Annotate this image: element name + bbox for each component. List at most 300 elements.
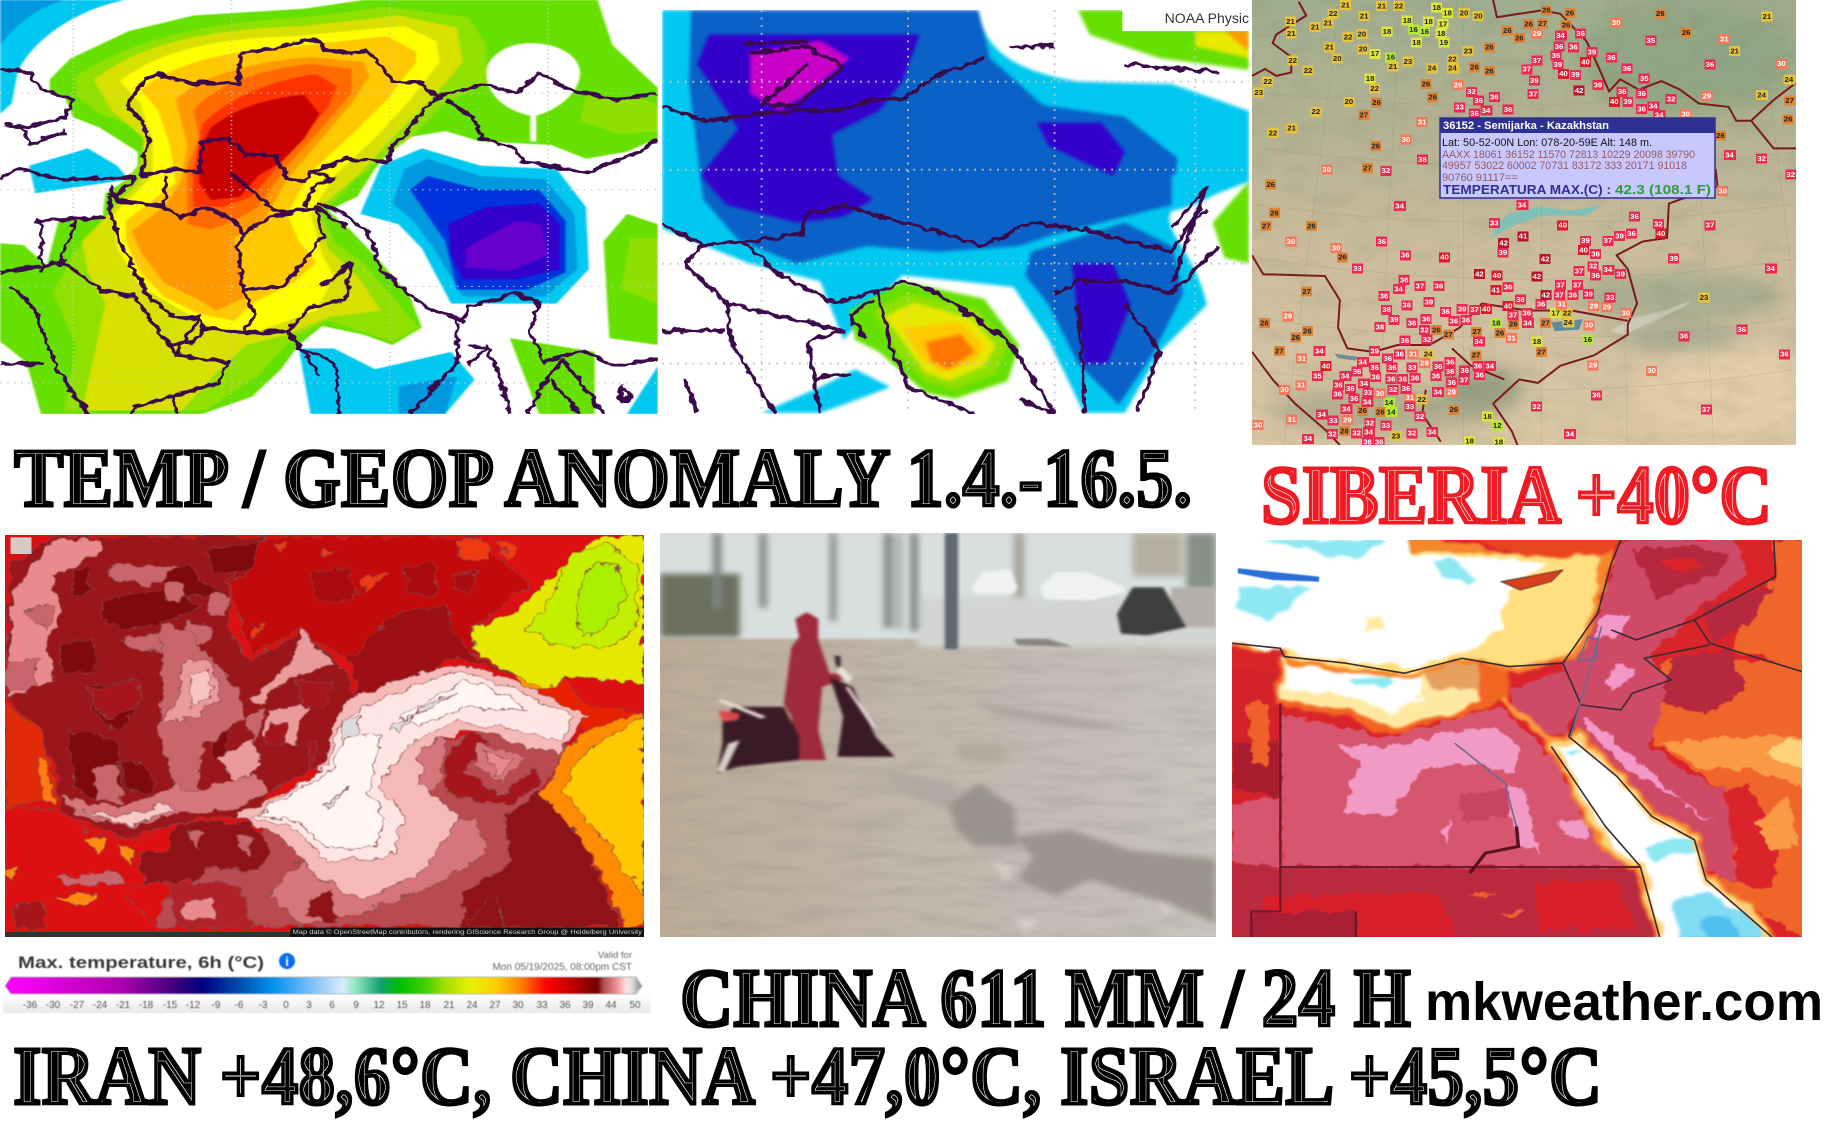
scale values: 24 — [466, 1000, 478, 1011]
weather stations: 26 — [1682, 28, 1690, 37]
weather stations: 20 — [1333, 54, 1342, 63]
weather stations: 34 — [1518, 201, 1527, 209]
weather stations: 32 — [1654, 220, 1663, 229]
weather stations: 18 — [1533, 337, 1541, 346]
weather stations: 26 — [1485, 43, 1494, 52]
panel: max temperature map — [5, 535, 644, 937]
weather stations: 30 — [1375, 389, 1384, 398]
heading: temperature records: IRAN +48,6°C, CHINA +47,0°C, ISRAEL +45,5°C — [13, 1030, 1602, 1123]
scale values: 0 — [283, 1000, 289, 1011]
weather stations: 16 — [1386, 53, 1395, 62]
weather stations: 29 — [1589, 302, 1598, 310]
weather stations: 26 — [1307, 222, 1316, 230]
weather stations: 34 — [1395, 202, 1405, 210]
weather stations: 31 — [1297, 381, 1305, 390]
weather stations: 26 — [1270, 209, 1279, 218]
weather stations: 30 — [1612, 18, 1621, 27]
country borders — [0, 40, 658, 414]
weather stations: 38 — [1382, 305, 1391, 314]
weather stations: 36 — [1432, 372, 1440, 380]
weather stations: 22 — [1329, 9, 1338, 18]
weather stations: 16 — [1409, 25, 1418, 34]
weather stations: 23 — [1464, 47, 1472, 55]
weather stations: 36 — [1350, 394, 1358, 403]
weather stations: 33 — [1606, 293, 1615, 302]
weather stations: 42 — [1499, 239, 1508, 248]
weather stations: 17 — [1439, 20, 1447, 28]
weather stations: 38 — [1418, 155, 1427, 164]
scale values: -15 — [163, 1000, 178, 1011]
weather stations: 31 — [1405, 393, 1414, 402]
weather stations: 32 — [1381, 166, 1390, 175]
top coast strip — [1447, 533, 1629, 555]
weather stations: 36 — [1618, 87, 1627, 96]
weather stations: 40 — [1559, 70, 1568, 78]
panel: max temperature legend — [3, 950, 651, 1013]
scale values: -27 — [70, 1000, 85, 1011]
Sudan — [1232, 863, 1660, 943]
weather stations: 34 — [1315, 347, 1324, 355]
Libya side — [1232, 670, 1280, 866]
weather stations: 36 — [1490, 93, 1499, 101]
weather stations: 26 — [1524, 20, 1533, 28]
weather stations: 26 — [1716, 131, 1725, 140]
weather stations: 38 — [1375, 323, 1384, 331]
scale values: 27 — [489, 1000, 501, 1011]
heading: Siberia: SIBERIA +40°C — [1261, 449, 1772, 542]
weather stations: 24 — [1427, 64, 1437, 73]
Sinai — [1509, 670, 1578, 737]
weather stations: 32 — [1667, 95, 1675, 103]
weather stations: 32 — [1786, 170, 1795, 179]
weather stations: 26 — [1565, 9, 1574, 17]
scale values: 36 — [559, 1000, 571, 1011]
weather stations: 26 — [1450, 405, 1458, 414]
lower right rose — [151, 730, 623, 927]
weather stations: 21 — [1360, 12, 1369, 20]
weather stations: 36 — [1395, 350, 1404, 359]
weather stations: 36 — [1375, 438, 1383, 447]
weather stations: 36 — [1679, 332, 1688, 341]
weather stations: 40 — [1579, 246, 1588, 254]
pale band — [236, 663, 589, 900]
weather stations: 34 — [1604, 265, 1613, 274]
weather stations: 36 — [1353, 367, 1361, 376]
weather stations: 34 — [1565, 430, 1575, 438]
weather stations: 37 — [1575, 267, 1584, 275]
weather stations: 34 — [1485, 362, 1495, 370]
icon: info: i — [285, 954, 289, 969]
weather stations: 18 — [1403, 16, 1412, 25]
weather stations: 36 — [1461, 316, 1470, 324]
heading: China rainfall: CHINA 611 MM / 24 H — [680, 952, 1411, 1045]
weather stations: 14 — [1384, 398, 1394, 407]
weather stations: 23 — [1254, 88, 1263, 97]
weather stations: 26 — [1432, 326, 1441, 334]
weather stations: 36 — [1400, 276, 1409, 284]
weather stations: 39 — [1553, 60, 1562, 69]
weather stations: 26 — [1485, 67, 1494, 75]
weather stations: 29 — [1447, 388, 1456, 396]
weather stations: 36 — [1627, 229, 1636, 238]
grid dots — [662, 10, 1249, 414]
Mediterranean — [1218, 533, 1613, 678]
weather stations: 29 — [1602, 303, 1611, 311]
weather stations: 22 — [1448, 55, 1457, 64]
weather stations: 26 — [1358, 407, 1367, 415]
weather stations: 33 — [1490, 219, 1499, 228]
weather stations: 30 — [1585, 321, 1593, 330]
weather stations: 22 — [1312, 107, 1320, 116]
left maroon — [6, 537, 358, 837]
weather stations: 36 — [1380, 292, 1388, 300]
weather stations: 36 — [1422, 315, 1431, 323]
weather stations: 28 — [1340, 427, 1349, 436]
scale values: 39 — [582, 1000, 594, 1011]
weather stations: 26 — [1496, 329, 1504, 337]
weather stations: 39 — [1623, 97, 1632, 106]
weather stations: 34 — [1523, 319, 1533, 327]
weather stations: 39 — [1584, 290, 1593, 298]
bottom-left red with maroon knots — [5, 807, 181, 937]
weather stations: 36 — [1470, 109, 1479, 118]
weather stations: 29 — [1454, 81, 1462, 90]
weather stations: 40 — [1610, 97, 1619, 106]
scooter rider — [717, 612, 895, 773]
weather stations: 24 — [1785, 75, 1794, 84]
weather stations: 22 — [1417, 395, 1426, 404]
weather stations: 42 — [1475, 270, 1484, 278]
yellow/orange sea — [518, 677, 564, 700]
weather stations: 22 — [1288, 56, 1297, 65]
weather stations: 37 — [1706, 221, 1714, 230]
weather stations: 36 — [1474, 96, 1483, 105]
weather stations: 37 — [1470, 305, 1479, 314]
weather stations: 36 — [1434, 362, 1443, 371]
weather stations: 30 — [1287, 237, 1295, 246]
weather stations: 42 — [1541, 255, 1549, 263]
weather stations: 22 — [1563, 309, 1572, 318]
weather stations: 33 — [1364, 388, 1372, 397]
weather stations: 36 — [1780, 350, 1789, 359]
weather stations: 21 — [1377, 2, 1386, 10]
weather stations: 36 — [1737, 325, 1746, 334]
weather stations: 27 — [1537, 348, 1546, 356]
weather stations: 26 — [1376, 408, 1385, 416]
weather stations: 20 — [1359, 45, 1367, 54]
country borders — [662, 42, 1219, 414]
legend title: Max. temperature, 6h (°C) — [18, 953, 264, 972]
weather stations: 36 — [1411, 374, 1419, 382]
weather stations: 21 — [1324, 19, 1332, 27]
weather stations: 22 — [1263, 77, 1272, 86]
weather stations: 21 — [1287, 124, 1296, 133]
weather stations: 33 — [1381, 421, 1390, 430]
weather stations: 34 — [1341, 372, 1350, 380]
weather stations: 36 — [1447, 378, 1456, 387]
weather stations: 39 — [1499, 248, 1507, 257]
scale values: 21 — [443, 1000, 455, 1011]
weather stations: 16 — [1420, 27, 1429, 36]
weather stations: 36 — [1504, 283, 1512, 291]
scale values: -30 — [46, 1000, 61, 1011]
valid time: Valid for — [598, 950, 632, 961]
attribution strip: Map data © OpenStreetMap contributors, rendering GIScience Research Group @ Heidelberg University — [293, 929, 643, 936]
weather stations: 36 — [1569, 43, 1578, 52]
weather stations: 32 — [1589, 262, 1597, 271]
weather stations: 30 — [1280, 385, 1289, 394]
weather stations: 23 — [1404, 57, 1412, 66]
scale values: -21 — [116, 1000, 131, 1011]
Egypt — [1280, 707, 1640, 866]
Red Sea — [1545, 732, 1780, 943]
weather stations: 23 — [1700, 293, 1708, 302]
weather stations: 35 — [1640, 74, 1649, 83]
weather stations: 20 — [1474, 12, 1483, 20]
grid dots — [0, 0, 658, 414]
weather stations: 34 — [1342, 405, 1351, 413]
scale values: 6 — [329, 1000, 335, 1011]
weather stations: 27 — [1472, 328, 1481, 336]
weather stations: 37 — [1556, 281, 1565, 289]
weather stations: 32 — [1365, 419, 1374, 427]
weather stations: 36 — [1522, 309, 1531, 318]
weather stations: 18 — [1437, 29, 1446, 38]
weather stations: 42 — [1533, 272, 1541, 281]
weather stations: 16 — [1583, 335, 1592, 344]
weather stations: 39 — [1370, 347, 1379, 355]
weather stations: 31 — [1720, 35, 1729, 43]
weather stations: 36 — [1388, 363, 1397, 372]
weather stations: 39 — [1390, 315, 1398, 324]
weather stations: 30 — [1681, 110, 1690, 118]
weather stations: 27 — [1538, 19, 1547, 28]
weather stations: 36 — [1446, 358, 1455, 367]
weather stations: 36 — [1333, 390, 1342, 399]
weather stations: 36 — [1450, 317, 1458, 325]
weather stations: 27 — [1302, 287, 1311, 296]
weather stations: 21 — [1762, 12, 1771, 21]
weather stations: 32 — [1423, 335, 1431, 344]
weather stations: 17 — [1371, 49, 1379, 58]
weather stations: 41 — [1491, 286, 1500, 294]
top blotches — [227, 537, 530, 657]
weather stations: 36 — [1568, 291, 1577, 299]
weather stations: 32 — [1420, 326, 1429, 334]
weather stations: 21 — [1730, 47, 1739, 55]
weather stations: 27 — [1359, 111, 1368, 119]
weather stations: 36 — [1377, 237, 1386, 246]
weather stations: 39 — [1581, 236, 1590, 245]
weather stations: 26 — [1428, 93, 1437, 102]
weather stations: 36 — [1537, 300, 1545, 308]
weather stations: 36 — [1383, 354, 1392, 363]
callout: station tooltip: Lat: 50-52-00N Lon: 078-20-59E Alt: 148 m. — [1442, 137, 1652, 149]
weather stations: 27 — [1541, 319, 1550, 328]
weather stations: 26 — [1266, 180, 1275, 189]
weather stations: 36 — [1398, 375, 1407, 383]
weather stations: 27 — [1444, 330, 1453, 339]
weather stations: 40 — [1558, 221, 1567, 230]
callout: station tooltip: 42.3 (108.1 F) — [1615, 182, 1711, 197]
weather stations: 34 — [1363, 398, 1372, 406]
weather stations: 37 — [1533, 56, 1541, 65]
weather stations: 36 — [1591, 271, 1600, 280]
weather stations: 30 — [1647, 367, 1656, 375]
weather stations: 37 — [1522, 65, 1531, 74]
weather stations: 34 — [1358, 358, 1368, 367]
weather stations: 36 — [1607, 53, 1616, 62]
weather stations: 20 — [1358, 30, 1366, 38]
weather stations: 36 — [1401, 251, 1410, 260]
weather stations: 37 — [1702, 405, 1711, 414]
weather stations: 22 — [1395, 2, 1403, 10]
weather stations: 32 — [1416, 412, 1424, 421]
weather stations: 22 — [1304, 66, 1312, 75]
weather stations: 32 — [1328, 430, 1337, 438]
weather stations: 18 — [1494, 438, 1503, 446]
weather stations: 26 — [1371, 142, 1380, 150]
weather stations: 36 — [1637, 105, 1646, 113]
weather stations: 36 — [1473, 362, 1482, 370]
weather stations: 29 — [1284, 312, 1292, 321]
weather stations: 32 — [1757, 154, 1766, 163]
weather stations: 22 — [1370, 84, 1379, 93]
weather stations: 37 — [1416, 282, 1424, 290]
weather stations: 33 — [1329, 416, 1338, 425]
weather stations: 34 — [1725, 151, 1735, 160]
panel: temperature anomaly map — [0, 0, 658, 414]
borders — [1252, 0, 1796, 445]
weather stations: 23 — [1392, 432, 1400, 440]
weather stations: 29 — [1589, 361, 1597, 370]
weather stations: 39 — [1571, 71, 1580, 79]
scale values: 18 — [419, 1000, 431, 1011]
Egypt north coast — [1277, 663, 1509, 737]
weather stations: 27 — [1472, 351, 1480, 360]
weather stations: 40 — [1322, 362, 1330, 370]
weather stations: 24 — [1757, 91, 1767, 100]
weather stations: 21 — [1341, 1, 1350, 9]
weather stations: 39 — [1530, 76, 1539, 85]
weather stations: 39 — [1615, 232, 1624, 240]
weather stations: 34 — [1394, 285, 1404, 293]
weather stations: 36 — [1637, 89, 1646, 98]
weather stations: 31 — [1287, 415, 1296, 424]
colour scale — [5, 977, 642, 994]
weather stations: 24 — [1424, 350, 1433, 359]
callout: station tooltip: TEMPERATURA MAX.(C) : — [1443, 182, 1611, 197]
weather stations: 34 — [1649, 102, 1658, 111]
weather stations: 37 — [1460, 376, 1468, 384]
weather stations: 26 — [1338, 253, 1347, 262]
scale values: -24 — [93, 1000, 108, 1011]
weather stations: 31 — [1557, 300, 1566, 309]
weather stations: 39 — [1593, 81, 1602, 89]
weather stations: 31 — [1297, 354, 1306, 363]
weather stations: 31 — [1507, 334, 1516, 342]
weather stations: 27 — [1275, 347, 1284, 355]
weather stations: 32 — [1467, 87, 1476, 96]
weather stations: 40 — [1440, 253, 1449, 262]
weather stations: 29 — [1343, 416, 1352, 424]
weather stations: 26 — [1509, 320, 1518, 329]
weather stations: 36 — [1363, 438, 1372, 447]
weather stations: 27 — [1363, 164, 1372, 172]
weather stations: 36 — [1504, 105, 1512, 114]
weather stations: 20 — [1460, 9, 1468, 17]
weather stations: 18 — [1383, 27, 1391, 36]
weather stations: 21 — [1325, 43, 1334, 52]
scale values: -36 — [23, 1000, 38, 1011]
weather stations: 32 — [1352, 429, 1361, 438]
weather stations: 36 — [1630, 212, 1639, 221]
weather stations: 35 — [1647, 36, 1655, 45]
callout: station tooltip — [1440, 118, 1715, 198]
weather stations — [1254, 1, 1795, 447]
weather stations: 36 — [1346, 384, 1355, 393]
weather stations: 34 — [1427, 428, 1437, 437]
weather stations: 37 — [1604, 236, 1612, 245]
callout: station tooltip: 36152 - Semijarka - Kazakhstan — [1443, 120, 1609, 132]
weather stations: 36 — [1592, 391, 1601, 400]
weather stations: 37 — [1555, 291, 1564, 299]
scale values: 3 — [306, 1000, 312, 1011]
weather stations: 39 — [1669, 254, 1678, 263]
weather stations: 27 — [1262, 222, 1271, 230]
weather stations: 34 — [1655, 111, 1664, 119]
weather stations: 39 — [1616, 270, 1625, 278]
scale values: -9 — [212, 1000, 221, 1011]
scale values: 33 — [536, 1000, 548, 1011]
weather stations: 34 — [1482, 106, 1491, 115]
weather stations: 22 — [1344, 33, 1352, 41]
weather stations: 32 — [1389, 385, 1397, 394]
icon: info — [279, 953, 295, 969]
weather stations: 14 — [1387, 408, 1396, 416]
weather stations: 34 — [1303, 434, 1313, 443]
weather stations: 18 — [1465, 437, 1474, 446]
weather stations: 18 — [1443, 9, 1452, 17]
weather stations: 37 — [1509, 311, 1517, 320]
weather stations: 24 — [1448, 64, 1458, 73]
weather stations: 40 — [1504, 302, 1512, 310]
panel: geopotential anomaly map — [662, 10, 1249, 414]
weather stations: 21 — [1287, 29, 1296, 38]
weather stations: 26 — [1291, 333, 1300, 342]
weather stations: 40 — [1482, 305, 1491, 313]
panel: station temperature map — [1252, 0, 1796, 447]
weather stations: 36 — [1334, 381, 1343, 389]
weather stations: 39 — [1587, 48, 1596, 56]
graticule — [1252, 0, 1796, 445]
weather stations: 36 — [1555, 42, 1563, 51]
weather stations: 39 — [1458, 305, 1466, 313]
weather stations: 22 — [1269, 129, 1277, 137]
weather stations: 40 — [1493, 271, 1501, 280]
weather stations: 39 — [1424, 298, 1433, 307]
panel: Middle East temperature map — [1232, 540, 1802, 937]
valid time: Mon 05/19/2025, 08:00pm CST — [492, 962, 632, 973]
weather stations: 26 — [1260, 319, 1269, 328]
weather stations: 32 — [1532, 402, 1541, 411]
Levant rose — [1563, 540, 1749, 883]
weather stations: 31 — [1409, 350, 1418, 359]
weather stations: 29 — [1533, 29, 1541, 38]
borders — [1232, 540, 1802, 937]
scale values: 30 — [512, 1000, 524, 1011]
weather stations: 21 — [1389, 62, 1397, 71]
